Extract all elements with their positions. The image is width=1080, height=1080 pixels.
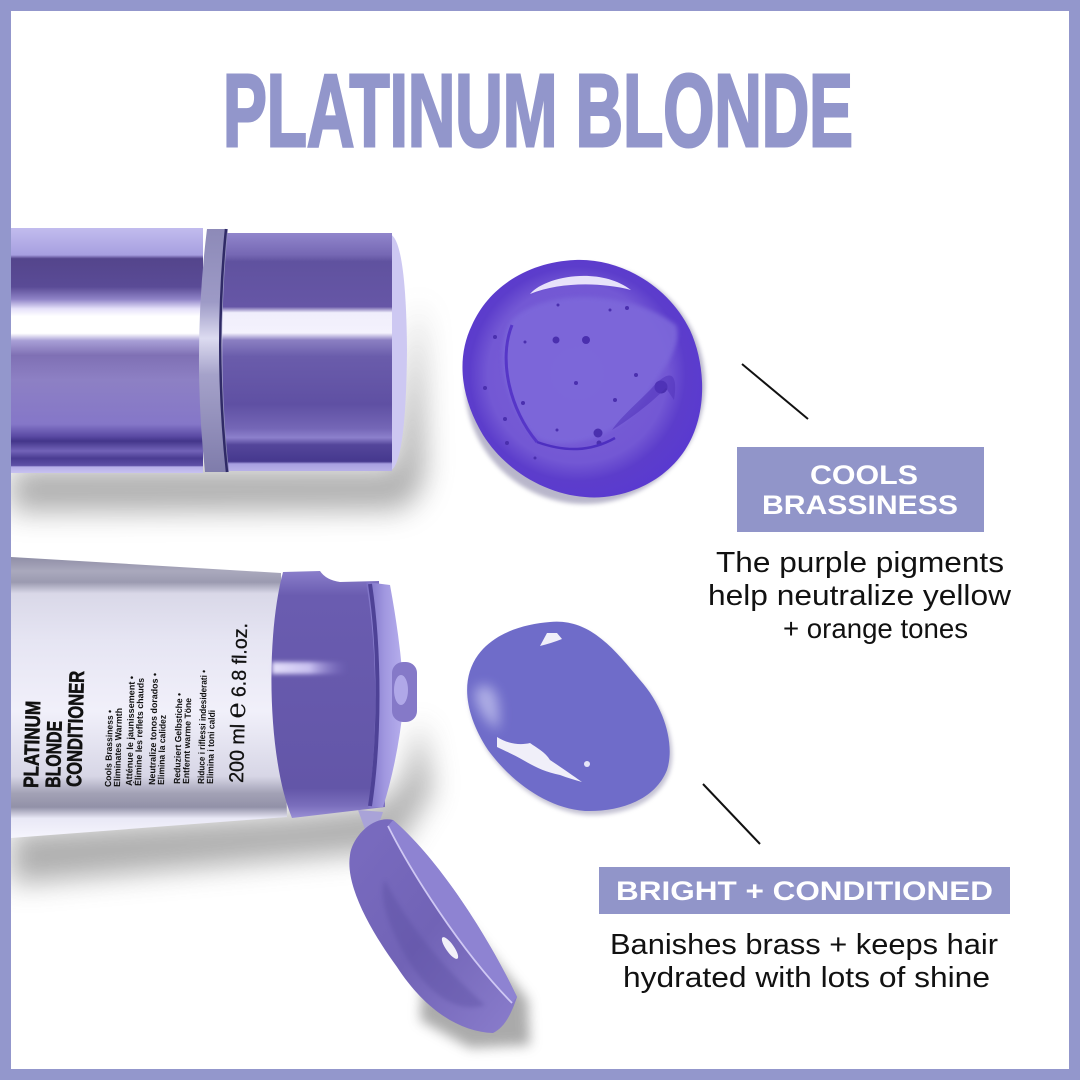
swatch textured centre: [503, 297, 678, 444]
conditioner swatch: [467, 622, 672, 815]
multilingual claims: Reduziert Gelbstiche •: [172, 693, 184, 784]
shampoo swatch: [462, 260, 705, 504]
text: bright + conditioned description: Banishes brass + keeps hair: [610, 929, 998, 961]
gloss highlights: [497, 737, 582, 782]
soft shine: [475, 685, 499, 730]
conditioner tube: [11, 557, 432, 884]
pointer line: cools brassiness: [742, 364, 808, 419]
multilingual claims: Riduce i riflessi indesiderati •: [196, 670, 209, 784]
product name: BLONDE: [42, 721, 67, 788]
swatch bubbles: [483, 304, 668, 460]
tube body: [11, 557, 287, 838]
bottle body: [11, 228, 203, 473]
bottle collar ring: [199, 229, 229, 472]
text: cools brassiness description: The purple pigments: [716, 547, 1004, 579]
open lid: [349, 810, 530, 1048]
pointer line: bright + conditioned: [703, 784, 760, 844]
swatch blob: [462, 260, 702, 497]
swatch shadow: [465, 264, 705, 504]
bottle shadow: [11, 300, 425, 512]
multilingual claims: Elimina la calidez: [156, 714, 168, 785]
multilingual claims: Neutralize tonos dorados •: [147, 673, 160, 785]
text: cools brassiness description: + orange tones: [783, 613, 968, 644]
lid outer band: [388, 820, 517, 1003]
shampoo bottle: [11, 228, 425, 512]
product name: PLATINUM: [20, 701, 45, 788]
badge: bright + conditioned: BRIGHT + CONDITIONED: [616, 876, 993, 906]
lid rim: [388, 826, 512, 1003]
product name: [20, 671, 89, 788]
multilingual claims: Eliminates Warmth: [112, 708, 124, 787]
lid shadow: [420, 880, 530, 1048]
text: cools brassiness description: help neutralize yellow: [708, 580, 1012, 612]
swatch blob: [467, 622, 670, 811]
cap highlight: [272, 662, 347, 674]
text: bright + conditioned description: hydrated with lots of shine: [623, 962, 990, 994]
cap top face: [366, 582, 404, 808]
tube label text: [20, 622, 253, 788]
lid highlight: [439, 935, 461, 961]
bottle cap: [219, 233, 392, 471]
swatch shadow: [469, 626, 672, 815]
size: 200 ml ℮ 6.8 fl.oz.: [219, 622, 253, 783]
text: cools brassiness description: [708, 547, 1012, 644]
badge: cools brassiness: BRASSINESS: [762, 490, 958, 520]
product name: CONDITIONER: [63, 671, 89, 787]
multilingual claims: Cools Brassiness •: [103, 710, 115, 787]
tube flip cap: [271, 571, 385, 818]
multilingual claims: [103, 670, 217, 787]
badge: bright + conditioned: [599, 867, 1010, 914]
text: bright + conditioned description: [610, 929, 998, 994]
lid shaded interior: [383, 880, 485, 1007]
badge: cools brassiness: COOLS: [810, 460, 918, 490]
lid shell: [349, 819, 517, 1033]
cap nozzle: [392, 662, 417, 722]
tube shadow: [11, 720, 432, 884]
lid hinge: [358, 810, 383, 835]
multilingual claims: Atténue le jaunissement •: [124, 676, 137, 786]
multilingual claims: Entfernt warme Töne: [181, 698, 193, 784]
multilingual claims: Élimine les reflets chauds: [133, 678, 146, 786]
bottle cap end: [390, 234, 407, 471]
badge: cools brassiness: [737, 447, 984, 532]
multilingual claims: Elimina i toni caldi: [205, 710, 217, 784]
swatch highlight: [530, 276, 631, 294]
